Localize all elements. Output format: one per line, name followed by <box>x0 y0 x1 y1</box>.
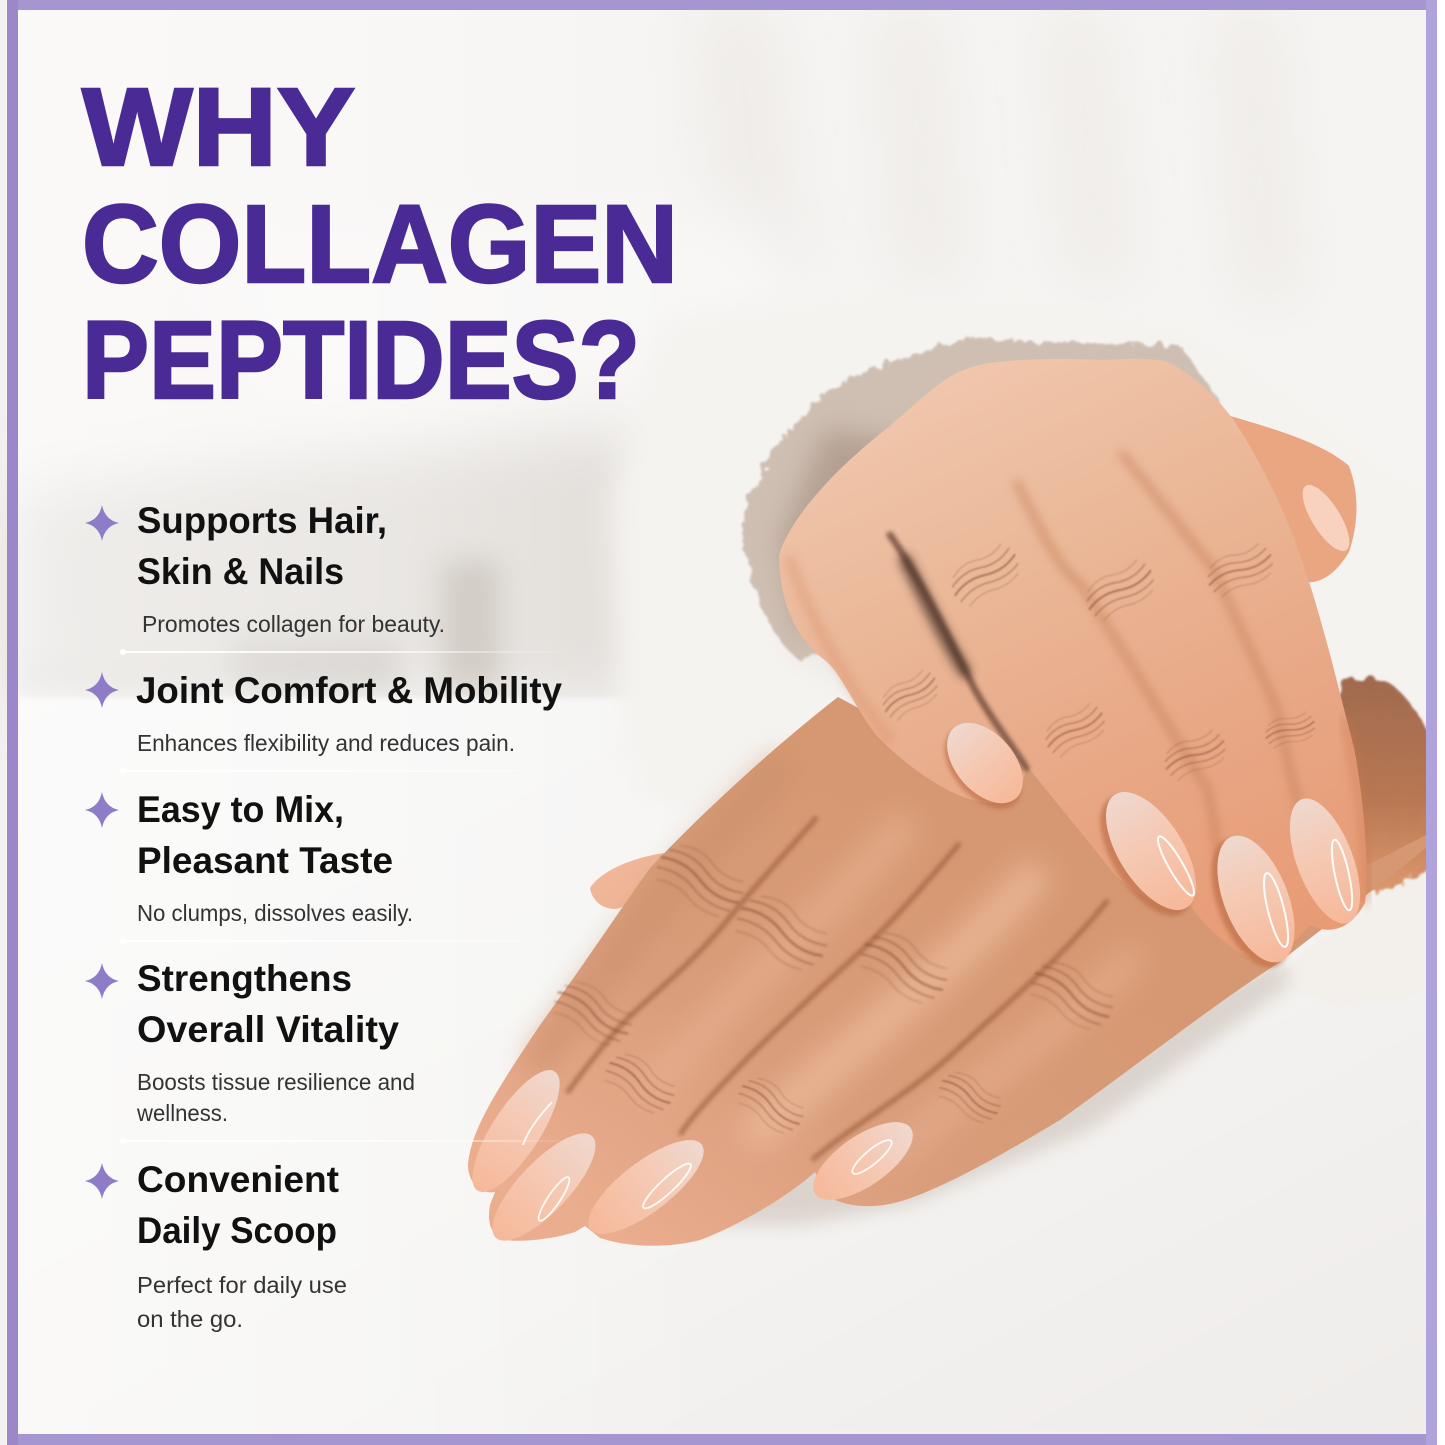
heading: supports hair: Skin & Nails <box>137 551 344 592</box>
lower hand silhouette <box>468 697 1426 1246</box>
heading: easy to mix: Easy to Mix, <box>137 789 344 830</box>
upper knuckle wrinkles <box>877 541 1318 783</box>
title: PEPTIDES? <box>82 299 640 422</box>
lower thumb <box>590 853 680 909</box>
heading: joint comfort: Joint Comfort & Mobility <box>136 670 562 711</box>
divider dot line 2 <box>120 768 577 774</box>
icon: sparkle star <box>85 792 119 828</box>
finger creases <box>567 817 1108 1160</box>
description: promotes collagen: Promotes collagen for beauty. <box>142 611 445 637</box>
heading: supports hair: Supports Hair, <box>137 500 387 541</box>
description: boosts tissue: wellness. <box>136 1100 228 1126</box>
icon: sparkle star <box>85 672 119 708</box>
heading: strengthens <box>137 958 399 1050</box>
pinky finger <box>1210 410 1357 583</box>
finger shading <box>790 454 1366 900</box>
finger highlights <box>540 770 1130 1150</box>
heading: easy to mix <box>137 789 393 881</box>
heading: convenient: Convenient <box>137 1159 339 1200</box>
description: perfect for daily use: on the go. <box>137 1306 243 1332</box>
description: perfect for daily use: Perfect for daily use <box>137 1272 347 1298</box>
upper hand back <box>779 359 1367 964</box>
benefit: strengthens overall vitality <box>85 958 415 1126</box>
benefit: supports hair, skin and nails <box>85 500 445 637</box>
bathrobe sleeve <box>610 296 1445 1005</box>
divider dot line 3 <box>120 938 577 944</box>
knuckle wrinkles <box>548 836 1119 1140</box>
description: no clumps: No clumps, dissolves easily. <box>137 900 413 926</box>
benefit: convenient daily scoop <box>85 1159 347 1332</box>
upper hand <box>779 359 1375 978</box>
icon: sparkle star <box>85 505 119 541</box>
divider dot line 1 <box>120 649 577 655</box>
upper nails <box>932 709 1375 973</box>
title: COLLAGEN <box>82 183 678 306</box>
title <box>82 66 678 422</box>
heading: supports hair <box>137 500 387 592</box>
benefit: easy to mix <box>85 789 413 926</box>
upper nail shadows <box>930 713 1307 978</box>
description: perfect for daily use <box>137 1272 347 1332</box>
heading: convenient: Daily Scoop <box>137 1210 337 1251</box>
description: enhances flexibility: Enhances flexibility and reduces pain. <box>137 730 515 756</box>
divider dot line 4 <box>120 1138 577 1144</box>
benefit: joint comfort and mobility <box>85 670 562 756</box>
icon: sparkle star <box>85 963 119 999</box>
heading: strengthens: Overall Vitality <box>137 1009 399 1050</box>
pinky nail <box>1294 478 1358 558</box>
lower nails <box>457 1058 925 1255</box>
icon: sparkle star <box>85 1163 119 1199</box>
heading: convenient <box>137 1159 339 1251</box>
hands <box>457 359 1426 1255</box>
lower hand <box>457 697 1426 1255</box>
description: boosts tissue: Boosts tissue resilience and <box>137 1069 415 1095</box>
description: boosts tissue <box>136 1069 415 1126</box>
soft shadow under lower hand <box>590 960 1290 1225</box>
heading: strengthens: Strengthens <box>137 958 352 999</box>
title: WHY <box>82 66 355 189</box>
heading: easy to mix: Pleasant Taste <box>137 840 393 881</box>
